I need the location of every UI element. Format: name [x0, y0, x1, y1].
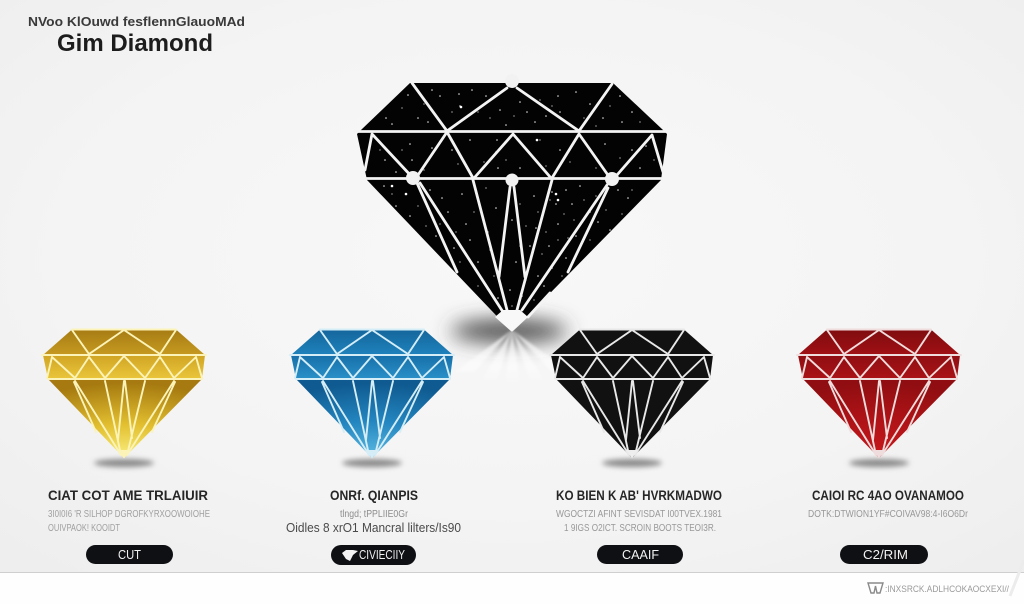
main diamond tip	[495, 310, 528, 332]
gold diamond	[42, 330, 206, 458]
clarity description	[286, 508, 461, 535]
carat heading: KO BIEN K AB' HVRKMADWO	[556, 488, 722, 503]
red diamond	[797, 330, 961, 458]
clarity button	[331, 545, 416, 565]
main diamond sparkles	[380, 90, 654, 306]
clarity heading: ONRf. QIANPIS	[330, 488, 418, 503]
carat description: 1 9IGS O2ICT. SCROIN BOOTS TEOI3R.	[564, 522, 716, 534]
black diamond shadow	[602, 459, 662, 467]
carat button	[597, 545, 683, 564]
gold diamond shadow	[94, 459, 154, 467]
clarity button: CIVIECIIY	[359, 548, 406, 562]
main diamond body	[357, 83, 667, 332]
color heading: CAIOI RC 4AO OVANAMOO	[812, 488, 964, 503]
main diamond shadow	[451, 320, 567, 342]
red diamond shadow	[849, 459, 909, 467]
cut button	[86, 545, 173, 564]
blue diamond shadow	[342, 459, 402, 467]
blue diamond	[290, 330, 454, 458]
black diamond	[550, 330, 714, 458]
main diamond facet lines	[355, 83, 668, 317]
main diamond nodes	[406, 74, 619, 186]
cut description	[48, 508, 210, 534]
title: Gim Diamond	[57, 30, 213, 57]
footer band	[0, 560, 1024, 604]
cut button: CUT	[118, 548, 141, 562]
footer text: :INXSRCK.ADLHCOKAOCXEXI//	[885, 584, 1009, 594]
panel: cut (gold)	[42, 330, 210, 564]
cut description: OUIVPAOK! KOOIDT	[48, 522, 120, 534]
main diamond light rays	[455, 330, 570, 384]
cut description: 3I0I0I6 'R SILHOP DGROFKYRXOOWOIOHE	[48, 508, 210, 520]
cut heading: CIAT COT AME TRLAIUIR	[48, 488, 208, 503]
color description: DOTK:DTWION1YF#COIVAV98:4-I6O6Dr	[808, 508, 968, 520]
carat button: CAAIF	[622, 548, 659, 562]
header	[28, 14, 245, 57]
footer icon	[868, 583, 883, 593]
color button	[840, 545, 928, 564]
panel: carat (black)	[550, 330, 722, 564]
main black diamond	[357, 83, 667, 359]
color button: C2/RIM	[863, 548, 908, 562]
carat description	[556, 508, 722, 534]
panel: color (red)	[797, 330, 968, 564]
clarity description: Oidles 8 xrO1 Mancral lilters/Is90	[286, 521, 461, 535]
header eyebrow: NVoo KlOuwd fesflennGlauoMAd	[28, 14, 245, 29]
panel: clarity (blue)	[286, 330, 461, 565]
carat description: WGOCTZI AFINT SEVISDAT I00TVEX.1981	[556, 508, 722, 520]
clarity description: tlngd; tPPLIIE0Gr	[340, 508, 408, 520]
clarity button icon	[342, 550, 358, 561]
